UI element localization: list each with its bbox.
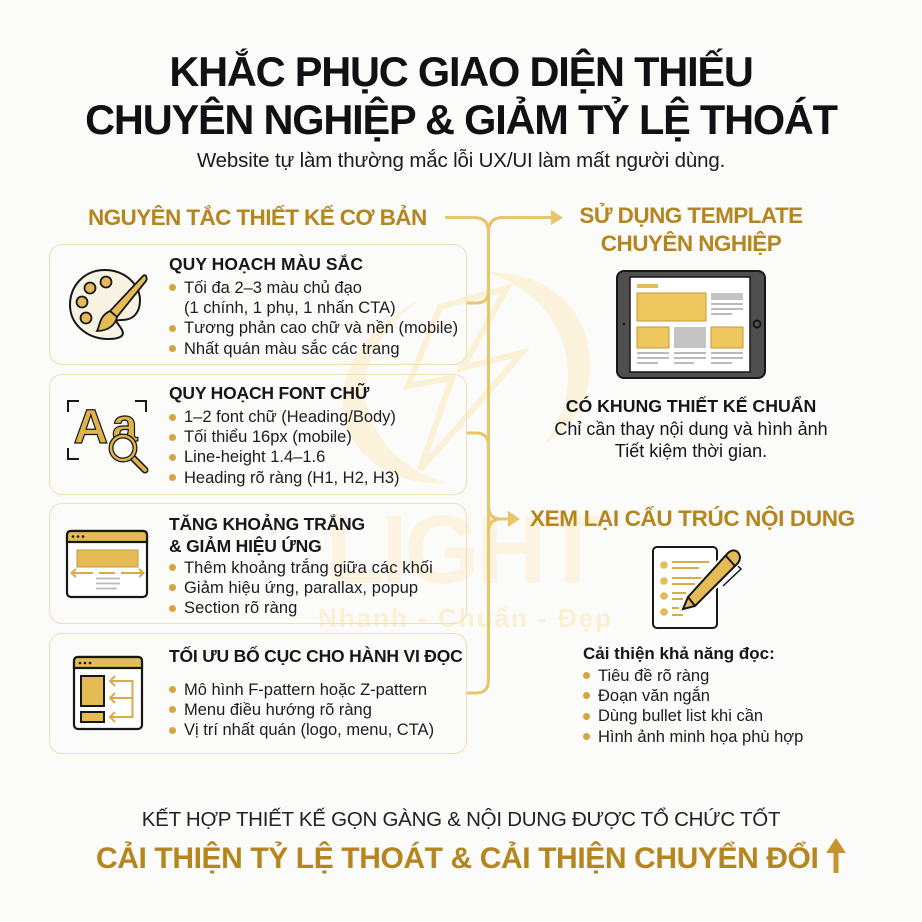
footer line: KẾT HỢP THIẾT KẾ GỌN GÀNG & NỘI DUNG ĐƯỢC TỔ CHỨC TỐT bbox=[142, 808, 780, 831]
heading: sử dụng template bbox=[579, 202, 803, 256]
list: màu sắc: (1 chính, 1 phụ, 1 nhấn CTA) bbox=[184, 299, 396, 317]
list: khả năng đọc: Hình ảnh minh họa phù hợp bbox=[598, 728, 803, 746]
icon: document and pencil bbox=[652, 546, 742, 629]
list: màu sắc: Nhất quán màu sắc các trang bbox=[184, 340, 400, 358]
list: font chữ bbox=[184, 408, 400, 487]
list: khoảng trắng: Thêm khoảng trắng giữa các khối bbox=[184, 559, 433, 577]
panel: tối ưu bố cục bbox=[49, 633, 467, 754]
list: khoảng trắng bbox=[184, 558, 433, 617]
list: bố cục: Mô hình F-pattern hoặc Z-pattern bbox=[184, 681, 427, 699]
list: font chữ: Line-height 1.4–1.6 bbox=[184, 448, 325, 466]
list: font chữ: Tối thiểu 16px (mobile) bbox=[184, 428, 352, 446]
title bbox=[85, 48, 838, 143]
list: bố cục: Menu điều hướng rõ ràng bbox=[184, 701, 372, 719]
list: bố cục: Vị trí nhất quán (logo, menu, CTA) bbox=[184, 721, 434, 739]
list: màu sắc: Tương phản cao chữ và nền (mobile) bbox=[184, 319, 458, 337]
list: khả năng đọc: Đoạn văn ngắn bbox=[598, 687, 710, 705]
icon: font Aa with magnifier bbox=[67, 399, 148, 474]
icon: palette and brush bbox=[69, 269, 148, 340]
footer highlight: CẢI THIỆN TỶ LỆ THOÁT & CẢI THIỆN CHUYỂN ĐỔI bbox=[96, 842, 818, 875]
list: khả năng đọc: Dùng bullet list khi cần bbox=[598, 707, 763, 725]
heading: tăng khoảng trắng: & GIẢM HIỆU ỨNG bbox=[169, 536, 322, 556]
icon: browser with spacing bbox=[66, 530, 148, 598]
text block: có khung thiết kế chuẩn: Chỉ cần thay nội dung và hình ảnh bbox=[554, 418, 828, 438]
title: KHẮC PHỤC GIAO DIỆN THIẾU bbox=[169, 48, 753, 95]
text block: có khung thiết kế chuẩn: CÓ KHUNG THIẾT KẾ CHUẨN bbox=[566, 396, 816, 416]
heading: xem lại cấu trúc: XEM LẠI CẤU TRÚC NỘI DUNG bbox=[530, 506, 855, 531]
list: font chữ: Heading rõ ràng (H1, H2, H3) bbox=[184, 469, 400, 487]
watermark logo: LIGHT bbox=[325, 495, 602, 604]
list: màu sắc: Tối đa 2–3 màu chủ đạo bbox=[184, 279, 362, 297]
heading: quy hoạch font chữ: QUY HOẠCH FONT CHỮ bbox=[169, 383, 369, 403]
list: bố cục bbox=[184, 681, 434, 739]
panel: quy hoạch màu sắc bbox=[49, 244, 467, 365]
icon: font Aa with magnifier: A bbox=[74, 401, 108, 454]
title: CHUYÊN NGHIỆP & GIẢM TỶ LỆ THOÁT bbox=[85, 96, 837, 143]
heading: sử dụng template: SỬ DỤNG TEMPLATE bbox=[579, 203, 803, 228]
heading: tối ưu bố cục: TỐI ƯU BỐ CỤC CHO HÀNH VI ĐỌC bbox=[169, 646, 463, 666]
icon: up arrow bbox=[826, 838, 846, 873]
watermark logo: Nhanh - Chuẩn - Đẹp bbox=[318, 603, 613, 633]
list: màu sắc bbox=[184, 279, 458, 358]
left heading: NGUYÊN TẮC THIẾT KẾ CƠ BẢN bbox=[88, 205, 427, 230]
list: khả năng đọc bbox=[598, 667, 803, 746]
text block: cải thiện khả năng đọc: Cải thiện khả năng đọc: bbox=[583, 644, 775, 663]
list: khoảng trắng: Giảm hiệu ứng, parallax, popup bbox=[184, 579, 418, 597]
panel: tăng khoảng trắng bbox=[49, 503, 467, 624]
list: font chữ: 1–2 font chữ (Heading/Body) bbox=[184, 408, 396, 426]
subtitle: Website tự làm thường mắc lỗi UX/UI làm mất người dùng. bbox=[197, 149, 725, 172]
list: khả năng đọc: Tiêu đề rõ ràng bbox=[598, 667, 709, 685]
list: khoảng trắng: Section rõ ràng bbox=[184, 599, 297, 617]
panel: quy hoạch font chữ bbox=[49, 374, 467, 495]
icon: font Aa with magnifier: a bbox=[112, 399, 138, 451]
icon: tablet template bbox=[616, 270, 766, 379]
heading: quy hoạch màu sắc: QUY HOẠCH MÀU SẮC bbox=[169, 254, 363, 274]
icon: browser layout bbox=[72, 656, 144, 730]
heading: tăng khoảng trắng: TĂNG KHOẢNG TRẮNG bbox=[169, 514, 365, 534]
text block: có khung thiết kế chuẩn: Tiết kiệm thời gian. bbox=[615, 441, 767, 461]
heading: sử dụng template: CHUYÊN NGHIỆP bbox=[601, 231, 781, 256]
text block: có khung thiết kế chuẩn bbox=[554, 396, 828, 461]
heading: tăng khoảng trắng bbox=[169, 514, 365, 556]
